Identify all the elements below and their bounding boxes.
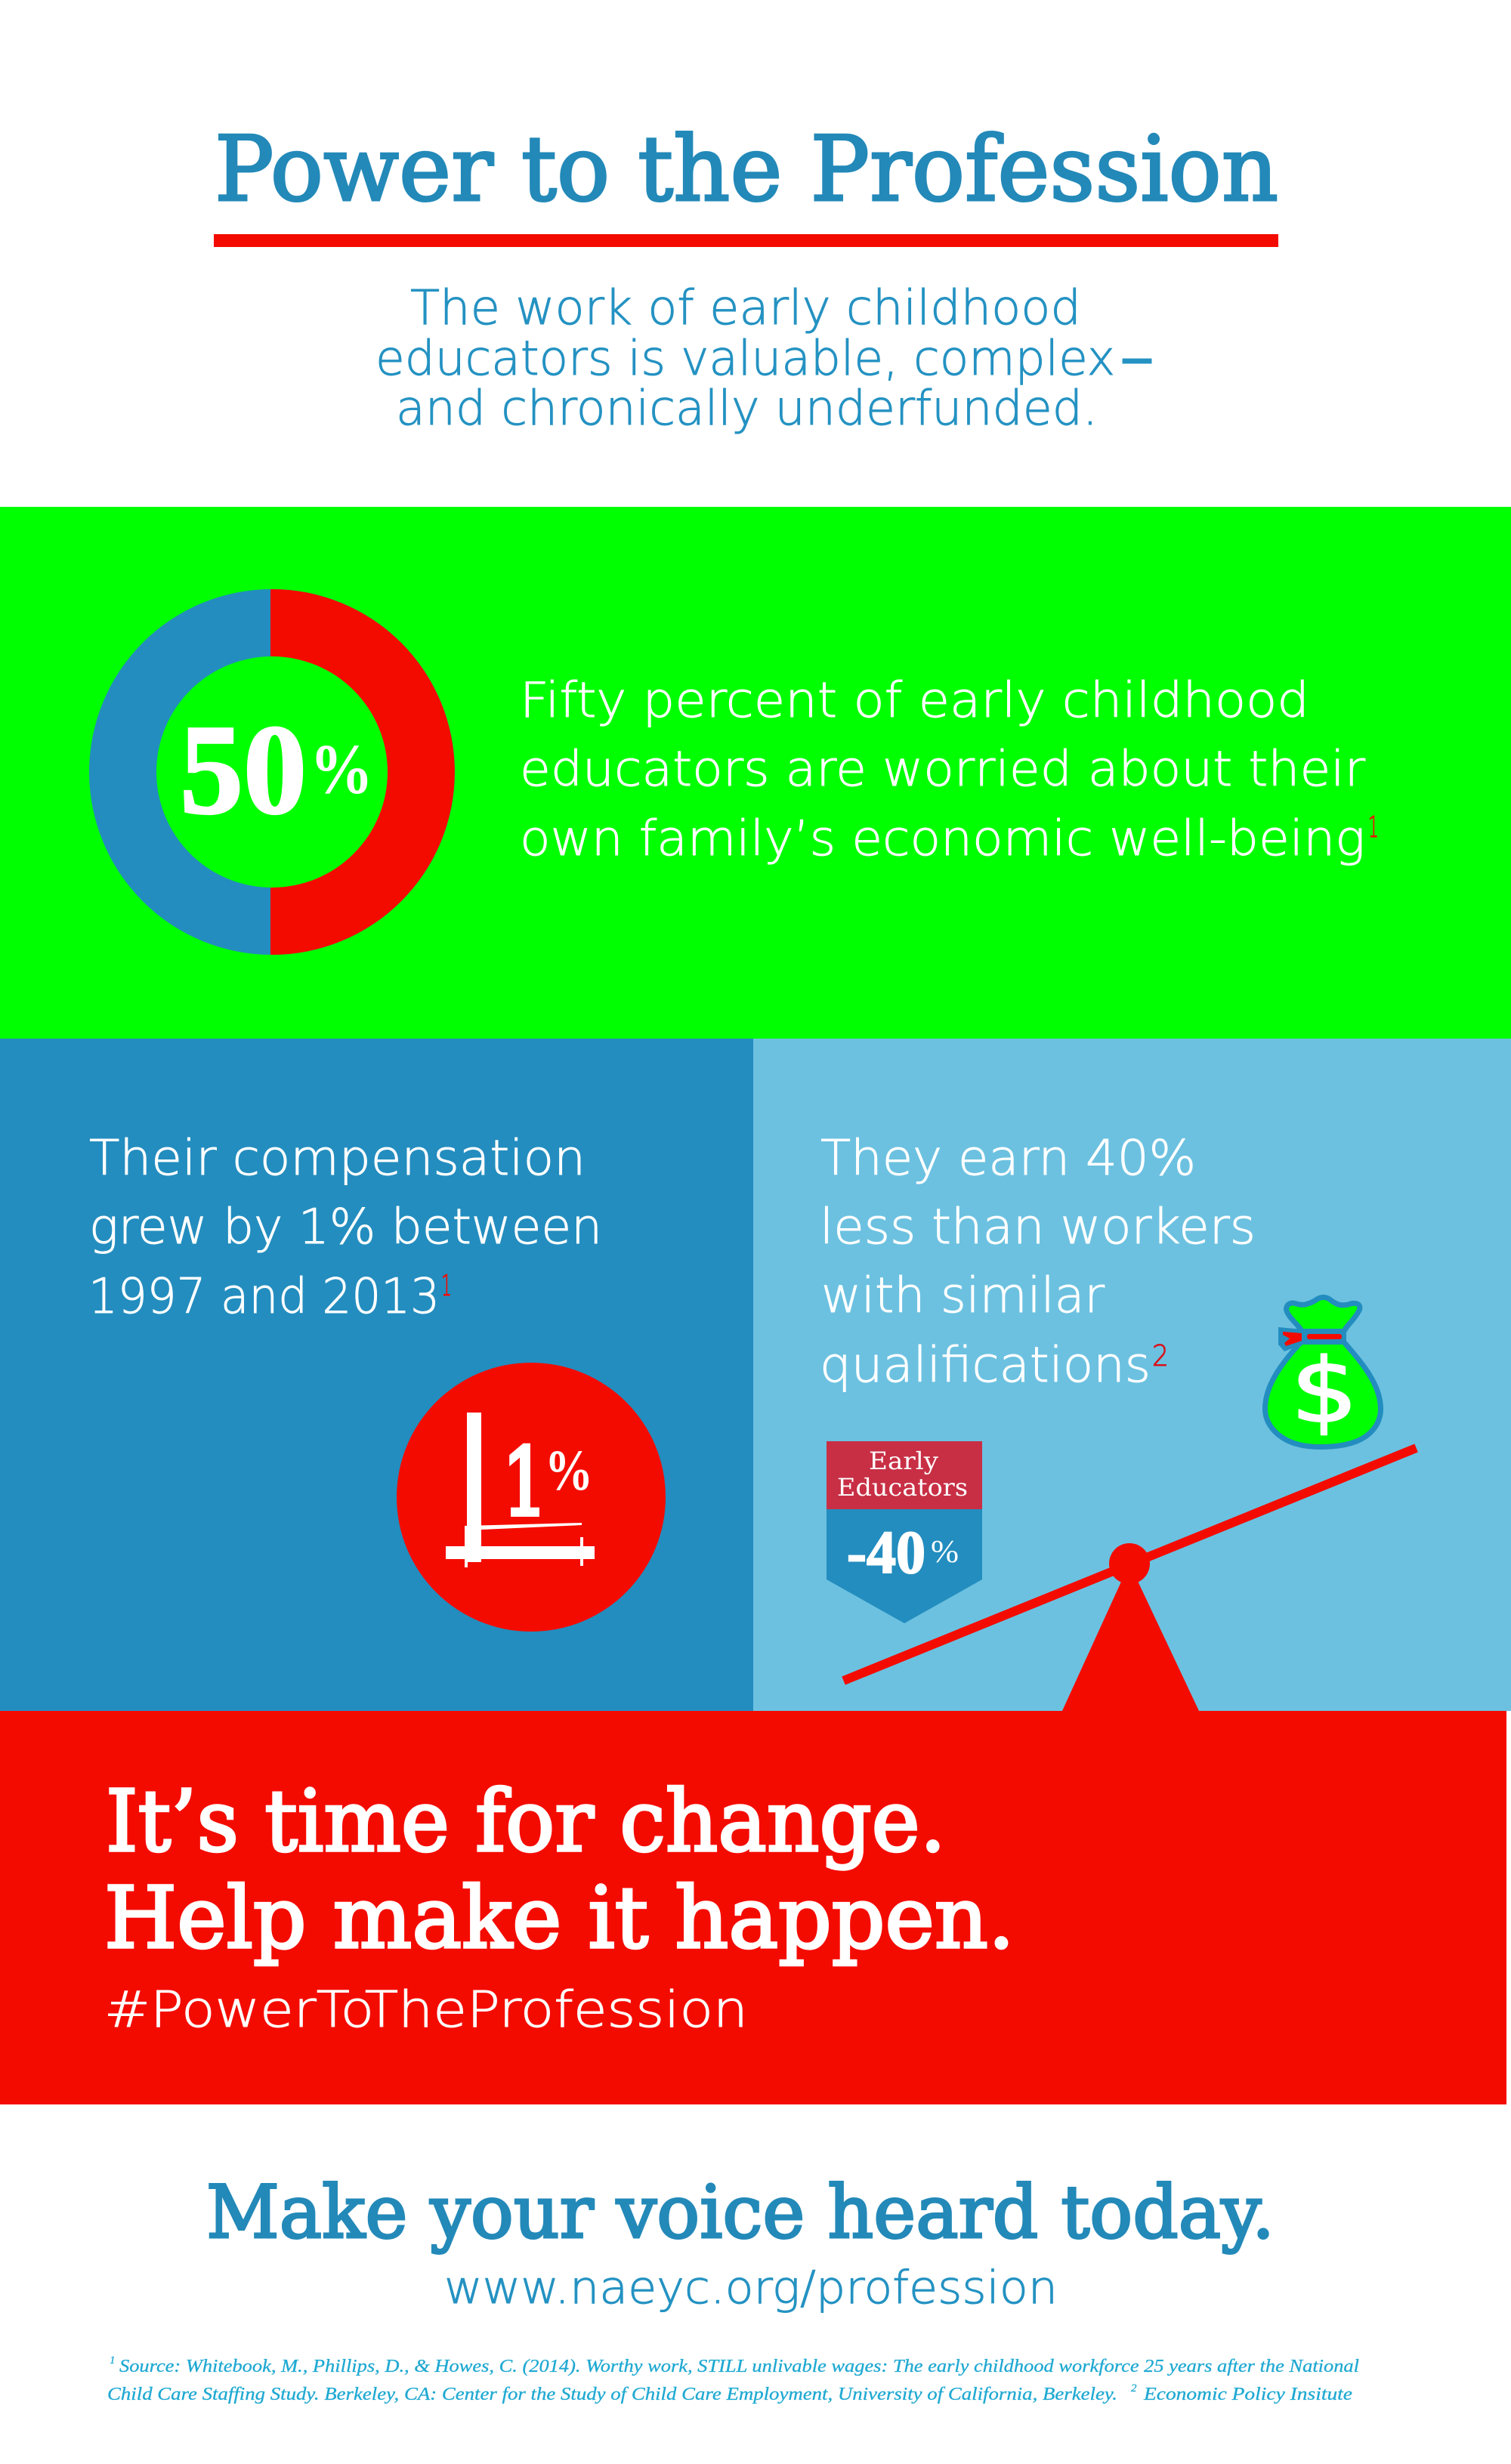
earnings text: 2 <box>1152 1339 1169 1372</box>
call to action heading: It’s time for change. <box>106 1773 946 1871</box>
footnotes: Child Care Staffing Study. Berkeley, CA: Center for the Study of Child Care Employment, University of California, Berkeley. <box>107 2385 1117 2404</box>
statement text: Fifty percent of early childhood <box>520 673 1309 729</box>
hashtag: #PowerToTheProfession <box>104 1981 748 2039</box>
statement text: own family’s economic well-being <box>520 811 1365 867</box>
light blue background <box>753 1039 1511 1711</box>
badge: early educators <box>827 1441 982 1623</box>
badge: early educators: -40 <box>847 1520 925 1586</box>
subtitle: and chronically underfunded. <box>396 381 1098 436</box>
donut chart: % <box>310 730 373 809</box>
earnings text: with similar <box>821 1268 1105 1324</box>
compensation text: grew by 1% between <box>89 1200 602 1255</box>
call to action heading: Help make it happen. <box>104 1870 1015 1968</box>
icon: one percent chart <box>397 1363 666 1632</box>
header <box>214 118 1278 436</box>
panel: compensation <box>0 1039 753 1711</box>
footnotes: Source: Whitebook, M., Phillips, D., & Howes, C. (2014). Worthy work, STILL unlivable wages: The early childhood workforce 25 years after the National <box>119 2357 1359 2376</box>
panel: fifty percent <box>0 507 1511 1039</box>
earnings text: qualifications <box>820 1338 1151 1394</box>
blue background <box>0 1039 753 1711</box>
statement text: 1 <box>1368 811 1379 844</box>
panel: call to action <box>0 1711 1506 2104</box>
icon: one percent chart: % <box>545 1439 593 1502</box>
earnings text <box>820 1131 1256 1394</box>
footnotes: 2 <box>1131 2382 1137 2395</box>
call to action heading <box>104 1773 1015 1968</box>
green background <box>0 507 1511 1039</box>
badge: early educators: Early <box>869 1447 938 1475</box>
subtitle <box>375 280 1151 436</box>
footnotes: 1 <box>110 2354 115 2367</box>
icon: one percent chart: 1 <box>502 1429 548 1537</box>
website url: www.naeyc.org/profession <box>444 2262 1058 2314</box>
footnotes <box>107 2354 1359 2404</box>
statement text: educators are worried about their <box>520 742 1366 798</box>
subtitle: The work of early childhood <box>410 280 1081 335</box>
statement text <box>520 673 1379 867</box>
compensation text: 1 <box>441 1269 452 1302</box>
icon: money bag: $ <box>1290 1339 1358 1443</box>
badge: early educators: Educators <box>837 1473 968 1502</box>
icon: seesaw <box>843 1448 1417 1711</box>
donut chart <box>89 589 455 955</box>
badge: early educators: % <box>931 1535 959 1570</box>
icon: money bag <box>1268 1300 1378 1444</box>
earnings text: They earn 40% <box>820 1131 1196 1187</box>
closing message <box>206 2170 1275 2314</box>
panel: earnings gap <box>753 1039 1511 1711</box>
donut chart: 50 <box>180 699 307 841</box>
subtitle: educators is valuable, complex <box>375 331 1115 386</box>
compensation text <box>88 1131 602 1325</box>
closing heading: Make your voice heard today. <box>206 2170 1275 2255</box>
compensation text: Their compensation <box>89 1131 586 1187</box>
compensation text: 1997 and 2013 <box>88 1269 440 1325</box>
red background <box>0 1711 1506 2104</box>
title underline <box>214 234 1278 247</box>
title: Power to the Profession <box>215 118 1278 222</box>
footnotes: Economic Policy Insitute <box>1143 2385 1352 2404</box>
earnings text: less than workers <box>820 1200 1256 1255</box>
